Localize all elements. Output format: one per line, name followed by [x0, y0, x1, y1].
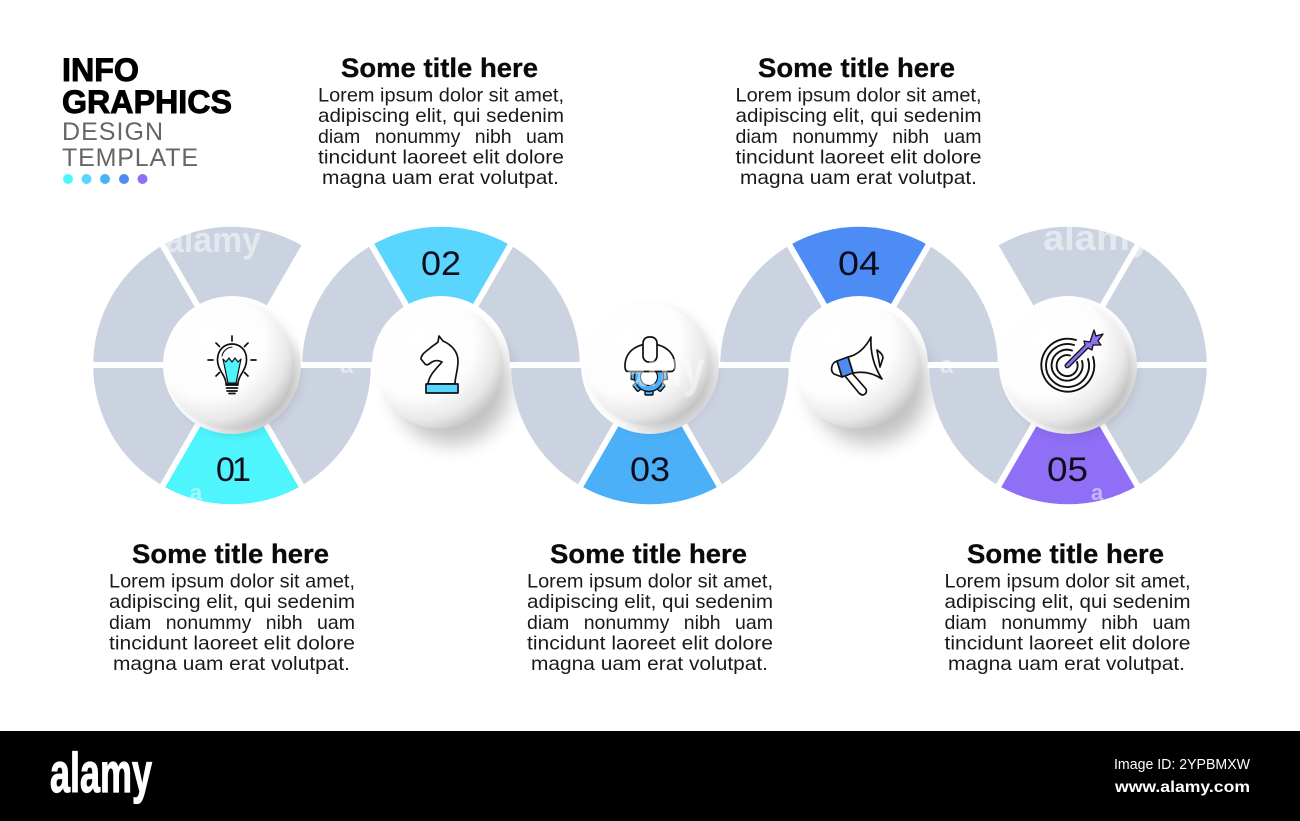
body text: magna uam erat volutpat.	[322, 167, 559, 189]
watermark fragments	[940, 217, 1151, 505]
subheading: design template: DESIGN	[62, 118, 163, 146]
watermark fragments: alamy	[165, 219, 261, 260]
step 4 segments	[719, 227, 999, 366]
body text: adipiscing elit, qui sedenim	[109, 591, 355, 613]
body text: Lorem ipsum dolor sit amet,	[109, 570, 355, 592]
number 03: 03	[630, 451, 670, 489]
body text: adipiscing elit, qui sedenim	[736, 105, 982, 127]
body text: diam nonummy nibh uam	[527, 612, 773, 634]
body text	[944, 570, 1190, 675]
step 2 wheel	[301, 227, 581, 444]
body text: magna uam erat volutpat.	[531, 653, 768, 675]
step 4 ball	[790, 296, 928, 444]
body text: diam nonummy nibh uam	[736, 126, 982, 148]
body text: tincidunt laoreet elit dolore	[109, 632, 355, 654]
number 01: 1	[232, 451, 251, 489]
body text: diam nonummy nibh uam	[318, 126, 564, 148]
icon: helmet and gear	[625, 337, 675, 395]
body text	[109, 570, 355, 675]
alamy logo: alamy	[50, 741, 152, 804]
heading: info graphics	[62, 52, 232, 120]
watermark fragments: a	[340, 352, 354, 379]
subheading: design template: TEMPLATE	[62, 144, 198, 172]
number 02: 02	[421, 245, 461, 283]
body text: tincidunt laoreet elit dolore	[944, 632, 1190, 654]
step 3 ball	[581, 296, 719, 434]
title: Some title here	[967, 539, 1164, 569]
icon: megaphone	[832, 337, 883, 395]
body text: diam nonummy nibh uam	[944, 612, 1190, 634]
watermark on ball: alamy	[590, 341, 705, 397]
header: infographics design template	[62, 52, 232, 184]
text block: step 1	[109, 539, 355, 675]
body text: tincidunt laoreet elit dolore	[318, 146, 564, 168]
text block: step 2	[318, 53, 564, 189]
step 5 wheel	[928, 217, 1208, 505]
body text: adipiscing elit, qui sedenim	[318, 105, 564, 127]
number 05: 05	[1047, 451, 1088, 489]
title: Some title here	[550, 539, 747, 569]
image id: Image ID: 2YPBMXW	[1114, 756, 1251, 773]
title: Some title here	[341, 53, 538, 83]
icon: light bulb	[208, 336, 256, 394]
heading: info graphics: INFO	[62, 52, 139, 88]
body text: adipiscing elit, qui sedenim	[944, 591, 1190, 613]
step 4 wheel	[719, 227, 999, 444]
icon: target with arrow	[1041, 330, 1103, 392]
step 5 segments	[928, 227, 1208, 504]
step 1 wheel	[92, 219, 372, 505]
body text: magna uam erat volutpat.	[740, 167, 977, 189]
heading: info graphics: GRAPHICS	[62, 84, 232, 120]
colour dots	[63, 174, 148, 184]
body text	[736, 84, 982, 189]
body text: Lorem ipsum dolor sit amet,	[736, 84, 982, 106]
body text: magna uam erat volutpat.	[113, 653, 350, 675]
body text: tincidunt laoreet elit dolore	[527, 632, 773, 654]
watermark fragments: alamy	[1043, 217, 1151, 258]
body text: diam nonummy nibh uam	[109, 612, 355, 634]
step 3 segments	[510, 365, 790, 504]
number 01: 0	[216, 451, 235, 489]
step 2 segments	[301, 227, 581, 366]
step 2 ball	[372, 296, 510, 444]
step 3 wheel	[510, 296, 790, 504]
body text: adipiscing elit, qui sedenim	[527, 591, 773, 613]
body text: Lorem ipsum dolor sit amet,	[318, 84, 564, 106]
step 5 ball	[999, 296, 1137, 434]
body text: tincidunt laoreet elit dolore	[736, 146, 982, 168]
body text: magna uam erat volutpat.	[948, 653, 1185, 675]
step 1 ball	[163, 296, 301, 434]
watermark fragments: a	[1091, 480, 1104, 505]
subheading: design template	[62, 118, 198, 172]
watermark fragments	[165, 219, 354, 505]
number 04: 04	[838, 245, 880, 283]
watermark fragments: a	[940, 352, 954, 379]
text block: step 3	[527, 539, 773, 675]
body text	[527, 570, 773, 675]
body text: Lorem ipsum dolor sit amet,	[527, 570, 773, 592]
title: Some title here	[758, 53, 955, 83]
title: Some title here	[132, 539, 329, 569]
watermark fragments: a	[190, 480, 203, 505]
text block: step 4	[736, 53, 982, 189]
step 1 segments	[92, 227, 372, 504]
body text: Lorem ipsum dolor sit amet,	[944, 570, 1190, 592]
footer bar	[0, 731, 1300, 821]
text block: step 5	[944, 539, 1190, 675]
body text	[318, 84, 564, 189]
icon: chess knight	[421, 336, 458, 393]
site address: www.alamy.com	[1114, 779, 1250, 796]
